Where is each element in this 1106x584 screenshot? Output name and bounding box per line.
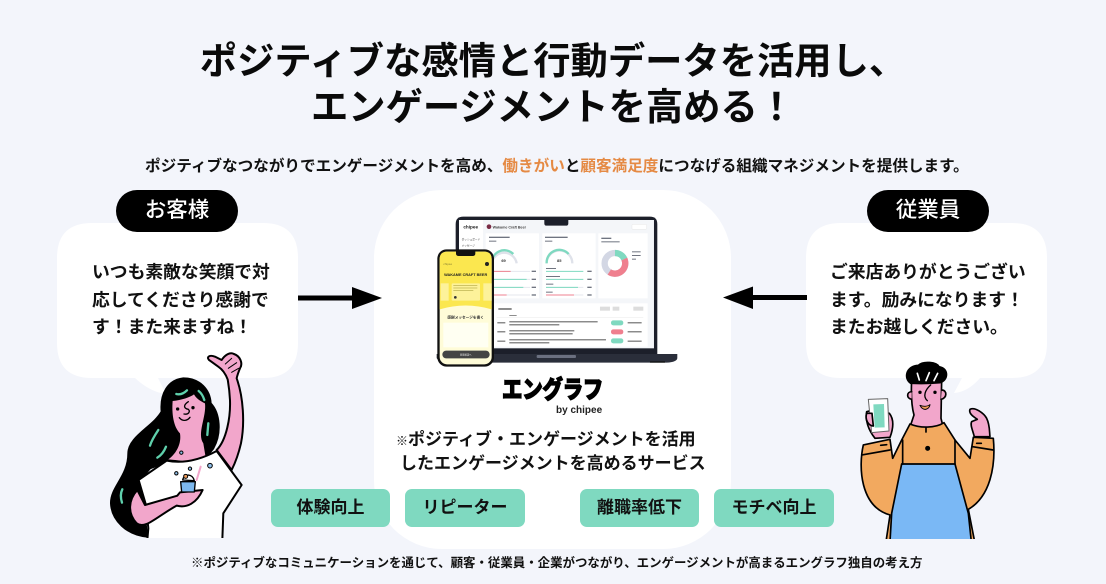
laptop: 69 — [501, 258, 507, 263]
jacket — [861, 423, 994, 542]
customer message — [92, 262, 270, 337]
logo: engraph by chipee — [502, 376, 603, 416]
line two: したエンゲージメントを高めるサービス — [400, 454, 706, 472]
chip: lower turnover — [580, 489, 699, 527]
chip: experience — [271, 489, 390, 527]
device mockup: laptop and phone — [437, 217, 677, 367]
logo wordmark: エングラフ — [502, 377, 603, 404]
hair back — [111, 378, 219, 537]
employee message: またお越しください。 — [830, 317, 1008, 337]
phone: 感謝メッセージを書く — [447, 315, 484, 320]
customer message: 応してくださり感謝で — [92, 290, 269, 310]
arrows and illustrations — [110, 216, 995, 539]
chip: experience: 体験向上 — [296, 498, 364, 517]
title: エンゲージメントを高める！ — [311, 86, 795, 128]
illustration: woman with thumbs up — [111, 353, 243, 540]
shirt fill — [139, 451, 242, 540]
laptop — [437, 217, 677, 363]
panel: center service panel — [374, 190, 731, 549]
face — [911, 380, 943, 427]
lower arm — [130, 490, 203, 525]
hair — [907, 362, 946, 384]
employee message — [830, 262, 1026, 337]
phone: WAKAME CRAFT BEER — [444, 273, 487, 277]
laptop: ダッシュボード — [462, 238, 481, 242]
line one: ※ポジティブ・エンゲージメントを活用 — [396, 430, 696, 449]
phone — [437, 249, 494, 367]
face details — [177, 402, 194, 420]
service description — [396, 430, 706, 472]
title — [200, 40, 906, 128]
raised arm with thumbs up — [208, 353, 243, 470]
finger lines — [225, 358, 239, 372]
laptop: chipee — [463, 224, 478, 229]
chip: motivation: モチベ向上 — [732, 498, 816, 517]
face details — [919, 385, 936, 401]
laptop: メッセージ — [462, 244, 475, 248]
laptop: 85 — [557, 258, 562, 263]
phone: 同意確認へ — [460, 353, 472, 357]
arrow: employee to service — [723, 286, 807, 309]
cup — [181, 482, 195, 492]
phone: chipee — [443, 262, 452, 266]
chip: repeater: リピーター — [422, 498, 508, 517]
label: customer — [116, 190, 238, 232]
speech bubble: customer — [57, 223, 298, 394]
apron — [890, 464, 971, 542]
customer message: す！また来ますね！ — [92, 317, 252, 337]
pointing hand — [970, 409, 990, 437]
label: employee: 従業員 — [896, 198, 960, 222]
customer message: いつも素敵な笑顔で対 — [92, 262, 270, 282]
title: ポジティブな感情と行動データを活用し、 — [200, 40, 906, 82]
chip: repeater — [405, 489, 525, 527]
jacket details — [862, 427, 993, 464]
label: employee — [867, 190, 989, 232]
laptop: Wakame Craft Beer — [493, 225, 527, 229]
label: customer: お客様 — [145, 198, 209, 222]
footnote: ※ポジティブなコミュニケーションを通じて、顧客・従業員・企業がつながり、エンゲージメントが高まるエングラフ独自の考え方 — [191, 556, 922, 570]
employee message: ます。励みになります！ — [830, 290, 1024, 310]
illustration: man with smartphone — [861, 362, 994, 542]
subtitle: ポジティブなつながりでエンゲージメントを高め、働きがいと顧客満足度につなげる組織マネジメントを提供します。 — [145, 158, 969, 175]
hair highlights — [121, 390, 208, 503]
face and neck — [168, 394, 206, 460]
left hand and phone — [866, 410, 893, 438]
logo byline: by chipee — [556, 405, 602, 416]
employee message: ご来店ありがとうござい — [830, 262, 1026, 282]
arrow: customer to service — [298, 287, 382, 309]
speech bubble: employee — [806, 223, 1047, 393]
chip: lower turnover: 離職率低下 — [597, 498, 682, 517]
chip: motivation — [714, 489, 834, 527]
